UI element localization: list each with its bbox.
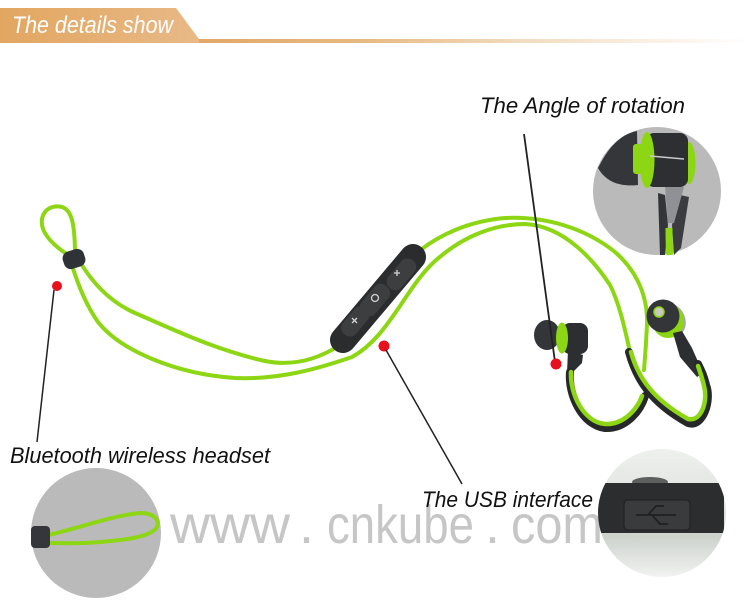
headset cable <box>42 206 647 378</box>
detail knot <box>31 526 50 548</box>
usb circle background <box>598 449 726 577</box>
watermark second dot: . <box>485 495 500 555</box>
usb detail circle <box>597 449 726 577</box>
cable loop <box>42 206 75 255</box>
loop marker <box>52 281 62 291</box>
detail left stem <box>658 193 668 255</box>
left green collar <box>556 322 568 354</box>
left ear tip <box>534 320 560 350</box>
detail highlight <box>650 156 684 159</box>
device top button <box>632 477 668 483</box>
plus mark <box>394 270 400 276</box>
callout: usb <box>378 340 726 577</box>
header strip <box>190 39 750 43</box>
rotation leader line <box>524 134 555 362</box>
detail housing <box>646 133 688 187</box>
inline remote control <box>338 255 419 340</box>
usb label: The USB interface <box>422 487 593 512</box>
usb leader line <box>386 350 462 484</box>
watermark first dot: . <box>299 495 314 555</box>
power mark <box>372 294 378 302</box>
usb marker <box>378 340 390 352</box>
left housing <box>562 323 588 354</box>
detail front collar <box>640 132 654 188</box>
watermark com: com <box>511 495 603 555</box>
rotation circle background <box>593 127 721 255</box>
rotation marker <box>550 358 562 370</box>
watermark cnkube: cnkube <box>327 495 474 555</box>
left hook green <box>571 372 642 424</box>
track mark <box>352 318 357 323</box>
upper left wire <box>80 262 340 363</box>
right green collar <box>652 304 684 338</box>
watermark www: www <box>169 495 291 555</box>
detail green wire <box>669 228 670 255</box>
loop circle background <box>31 468 161 598</box>
button glyphs <box>352 270 400 323</box>
lower left wire <box>72 224 630 378</box>
usb symbol <box>636 506 676 524</box>
cable knot <box>61 247 87 271</box>
power button <box>357 280 393 320</box>
rotation detail circle <box>593 127 721 255</box>
right body <box>648 297 692 343</box>
watermark url <box>169 495 603 555</box>
rotation label: The Angle of rotation <box>480 93 685 118</box>
header banner <box>0 8 750 43</box>
right stem <box>673 331 703 377</box>
detail hinge <box>665 187 684 223</box>
remote body <box>343 257 413 340</box>
left hook outer <box>570 372 645 428</box>
upper right wire <box>418 218 647 370</box>
usb device <box>597 477 724 533</box>
right hook green <box>631 352 705 419</box>
detail inner collar <box>633 144 642 174</box>
track button <box>338 303 373 340</box>
right ear tip <box>646 300 680 332</box>
loop label: Bluetooth wireless headset <box>10 443 272 468</box>
detail loop wire <box>48 513 158 543</box>
loop leader line <box>37 290 54 442</box>
detail right stem <box>672 195 689 255</box>
right nozzle <box>654 307 664 317</box>
right earbud <box>629 297 708 424</box>
header title: The details show <box>12 12 174 39</box>
detail rear collar <box>682 142 696 184</box>
device body <box>597 483 724 533</box>
usb cover <box>624 500 690 530</box>
callout: loop <box>10 281 272 598</box>
loop detail circle <box>31 468 161 598</box>
left earbud <box>534 320 645 428</box>
header tab <box>0 8 199 43</box>
callout: rotation <box>480 93 721 370</box>
right hook outer <box>629 352 708 424</box>
left stem <box>567 350 583 373</box>
detail ear tip <box>598 131 638 185</box>
volume button <box>383 255 419 294</box>
